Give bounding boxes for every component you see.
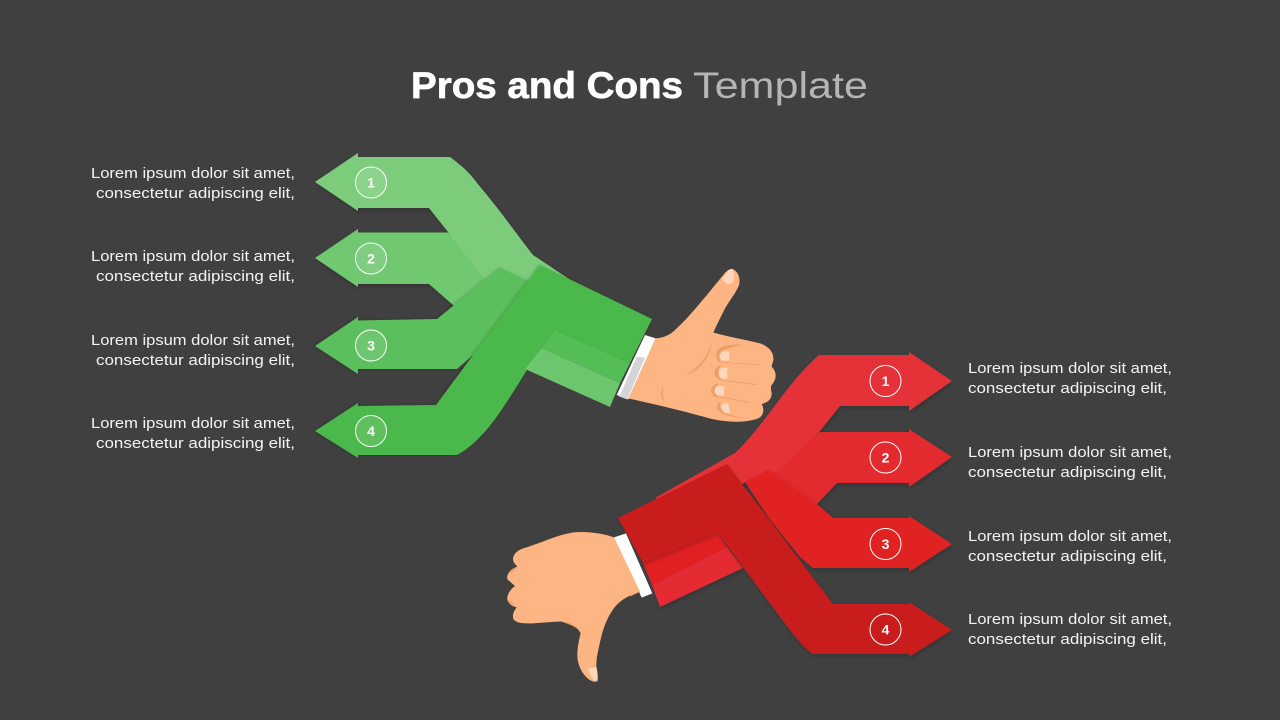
cons text 3: Lorem ipsum dolor sit amet,: [968, 528, 1172, 545]
cons text 3: [968, 528, 1172, 565]
pros text 4: Lorem ipsum dolor sit amet,: [91, 415, 295, 432]
left text block: [91, 165, 295, 452]
title: Pros and Cons: [411, 65, 683, 106]
cons text 1: consectetur adipiscing elit,: [968, 380, 1167, 397]
red arrow 1: [655, 352, 952, 520]
red arrow numbers: 3: [882, 536, 890, 552]
cons text 1: [968, 360, 1172, 397]
pros text 3: Lorem ipsum dolor sit amet,: [91, 332, 295, 349]
green arrows 1 and 2: [315, 153, 575, 330]
pros text 1: Lorem ipsum dolor sit amet,: [91, 165, 295, 182]
green sleeve stripe light: [525, 348, 620, 407]
green arrow numbers: 1: [367, 174, 375, 190]
red arrow 3: [745, 470, 952, 572]
pros text 2: [91, 248, 295, 285]
red arrow 4 and sleeve: [618, 464, 952, 657]
green arrow numbers: 2: [367, 250, 375, 266]
pros text 1: consectetur adipiscing elit,: [96, 185, 295, 202]
green arrow numbers: 3: [367, 338, 375, 354]
cons text 4: consectetur adipiscing elit,: [968, 631, 1167, 648]
red arrow 2: [745, 429, 952, 510]
green arrow numbers: [356, 167, 386, 446]
cons text 4: [968, 611, 1172, 648]
red sleeve stripe light: [652, 547, 743, 607]
cons text 3: consectetur adipiscing elit,: [968, 548, 1167, 565]
title: [411, 65, 868, 106]
green sleeve stripe mid: [542, 330, 630, 383]
green arrow 1: [315, 153, 575, 330]
red arrow numbers: 4: [882, 622, 890, 638]
pros text 4: [91, 415, 295, 452]
cons text 1: Lorem ipsum dolor sit amet,: [968, 360, 1172, 377]
red arrow numbers: 2: [882, 450, 890, 466]
cons text 2: consectetur adipiscing elit,: [968, 464, 1167, 481]
pros text 3: [91, 332, 295, 369]
pros text 3: consectetur adipiscing elit,: [96, 352, 295, 369]
red arrow numbers: 1: [882, 373, 890, 389]
icon: thumbs-down hand: [507, 532, 652, 682]
red arrows 1 and 2: [655, 352, 952, 520]
pros: green arrows with thumbs-up arm: [315, 153, 776, 458]
green arrow 4 and sleeve: [315, 265, 652, 458]
cons text 2: Lorem ipsum dolor sit amet,: [968, 444, 1172, 461]
green arrow numbers: 4: [367, 423, 375, 439]
pros text 1: [91, 165, 295, 202]
green arrow 2: [315, 229, 520, 330]
cons text 4: Lorem ipsum dolor sit amet,: [968, 611, 1172, 628]
green arrow 3: [315, 268, 530, 374]
cons: red arrows with thumbs-down arm: [507, 352, 952, 682]
pros text 2: consectetur adipiscing elit,: [96, 268, 295, 285]
red arrow numbers: [870, 366, 901, 645]
pros text 2: Lorem ipsum dolor sit amet,: [91, 248, 295, 265]
cons text 2: [968, 444, 1172, 481]
red sleeve stripe mid: [643, 532, 727, 585]
title: Template: [693, 65, 868, 106]
pros text 4: consectetur adipiscing elit,: [96, 435, 295, 452]
icon: thumbs-up hand: [617, 269, 776, 422]
right text block: [968, 360, 1172, 648]
